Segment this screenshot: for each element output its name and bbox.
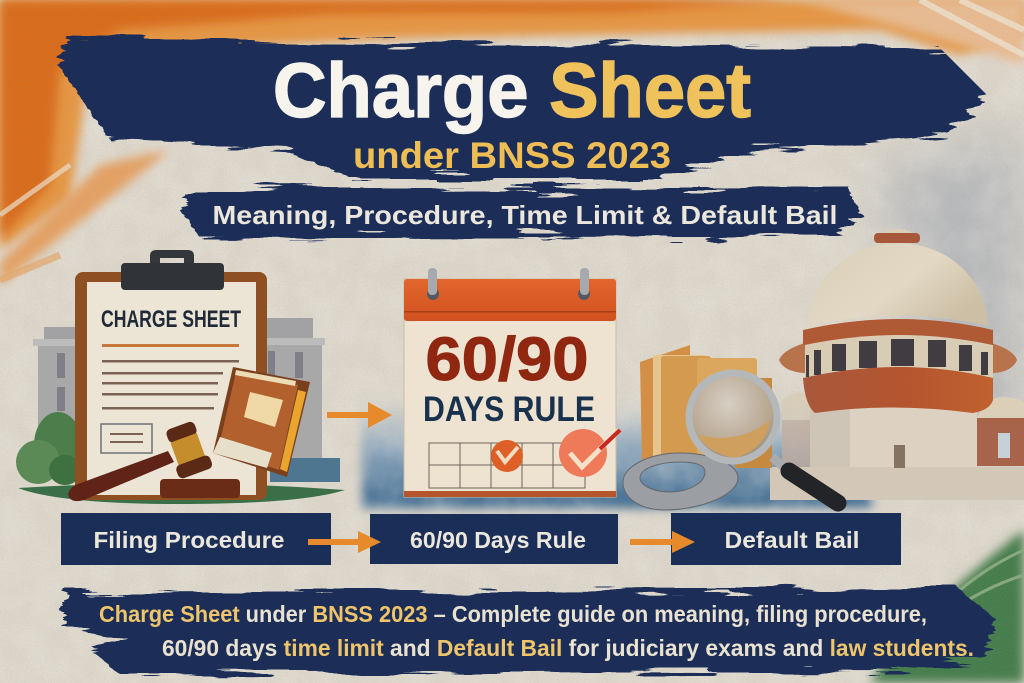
base <box>810 405 977 470</box>
subtitle brush <box>182 188 862 238</box>
title <box>273 48 751 176</box>
footer text: 60/90 days time limit and Default Bail for judiciary exams and law students. <box>162 635 974 661</box>
title: Charge Sheet <box>273 48 751 134</box>
subtitle: under BNSS 2023 <box>353 135 671 176</box>
gavel <box>68 419 240 501</box>
footer text <box>99 601 974 661</box>
sheet lines <box>101 344 239 453</box>
rings <box>427 268 590 300</box>
tagline: Meaning, Procedure, Time Limit & Default Bail <box>212 200 838 230</box>
dome cap <box>874 229 920 243</box>
green band bottom right <box>870 530 1024 683</box>
label: 60/90 days rule <box>370 514 618 564</box>
dome <box>807 243 988 326</box>
label: filing procedure <box>61 513 331 565</box>
folder book <box>213 367 310 477</box>
arrow 3 <box>630 531 695 553</box>
arrow 2 <box>308 531 381 553</box>
60/90: 60/90 <box>426 325 588 393</box>
right small wing <box>971 397 1024 466</box>
handcuffs <box>623 453 738 510</box>
grid <box>429 443 585 488</box>
footer brush <box>60 590 995 674</box>
footer text: Charge Sheet under BNSS 2023 – Complete guide on meaning, filing procedure, <box>99 601 927 627</box>
label: 60/90 days rule: 60/90 Days Rule <box>410 527 586 553</box>
clipboard <box>75 250 267 500</box>
label: default bail: Default Bail <box>724 527 860 553</box>
clip <box>121 250 224 290</box>
court building <box>770 229 1024 500</box>
brim <box>779 337 1017 373</box>
label: filing procedure: Filing Procedure <box>94 527 284 553</box>
orange saffron wash top <box>0 0 1024 285</box>
drum lower <box>803 367 993 413</box>
arrow: clipboard to calendar <box>327 402 392 428</box>
ground and bush <box>16 412 345 504</box>
title brush <box>58 38 982 178</box>
background building <box>33 318 340 482</box>
left small wing <box>782 392 815 470</box>
calendar <box>404 268 620 497</box>
red band <box>803 319 993 345</box>
folders <box>640 345 772 468</box>
magnifying glass <box>689 373 838 503</box>
windows band <box>805 335 993 380</box>
check marks <box>491 429 620 477</box>
label: default bail <box>671 513 901 565</box>
days rule: DAYS RULE <box>423 390 595 429</box>
sheet heading: CHARGE SHEET <box>101 306 241 333</box>
